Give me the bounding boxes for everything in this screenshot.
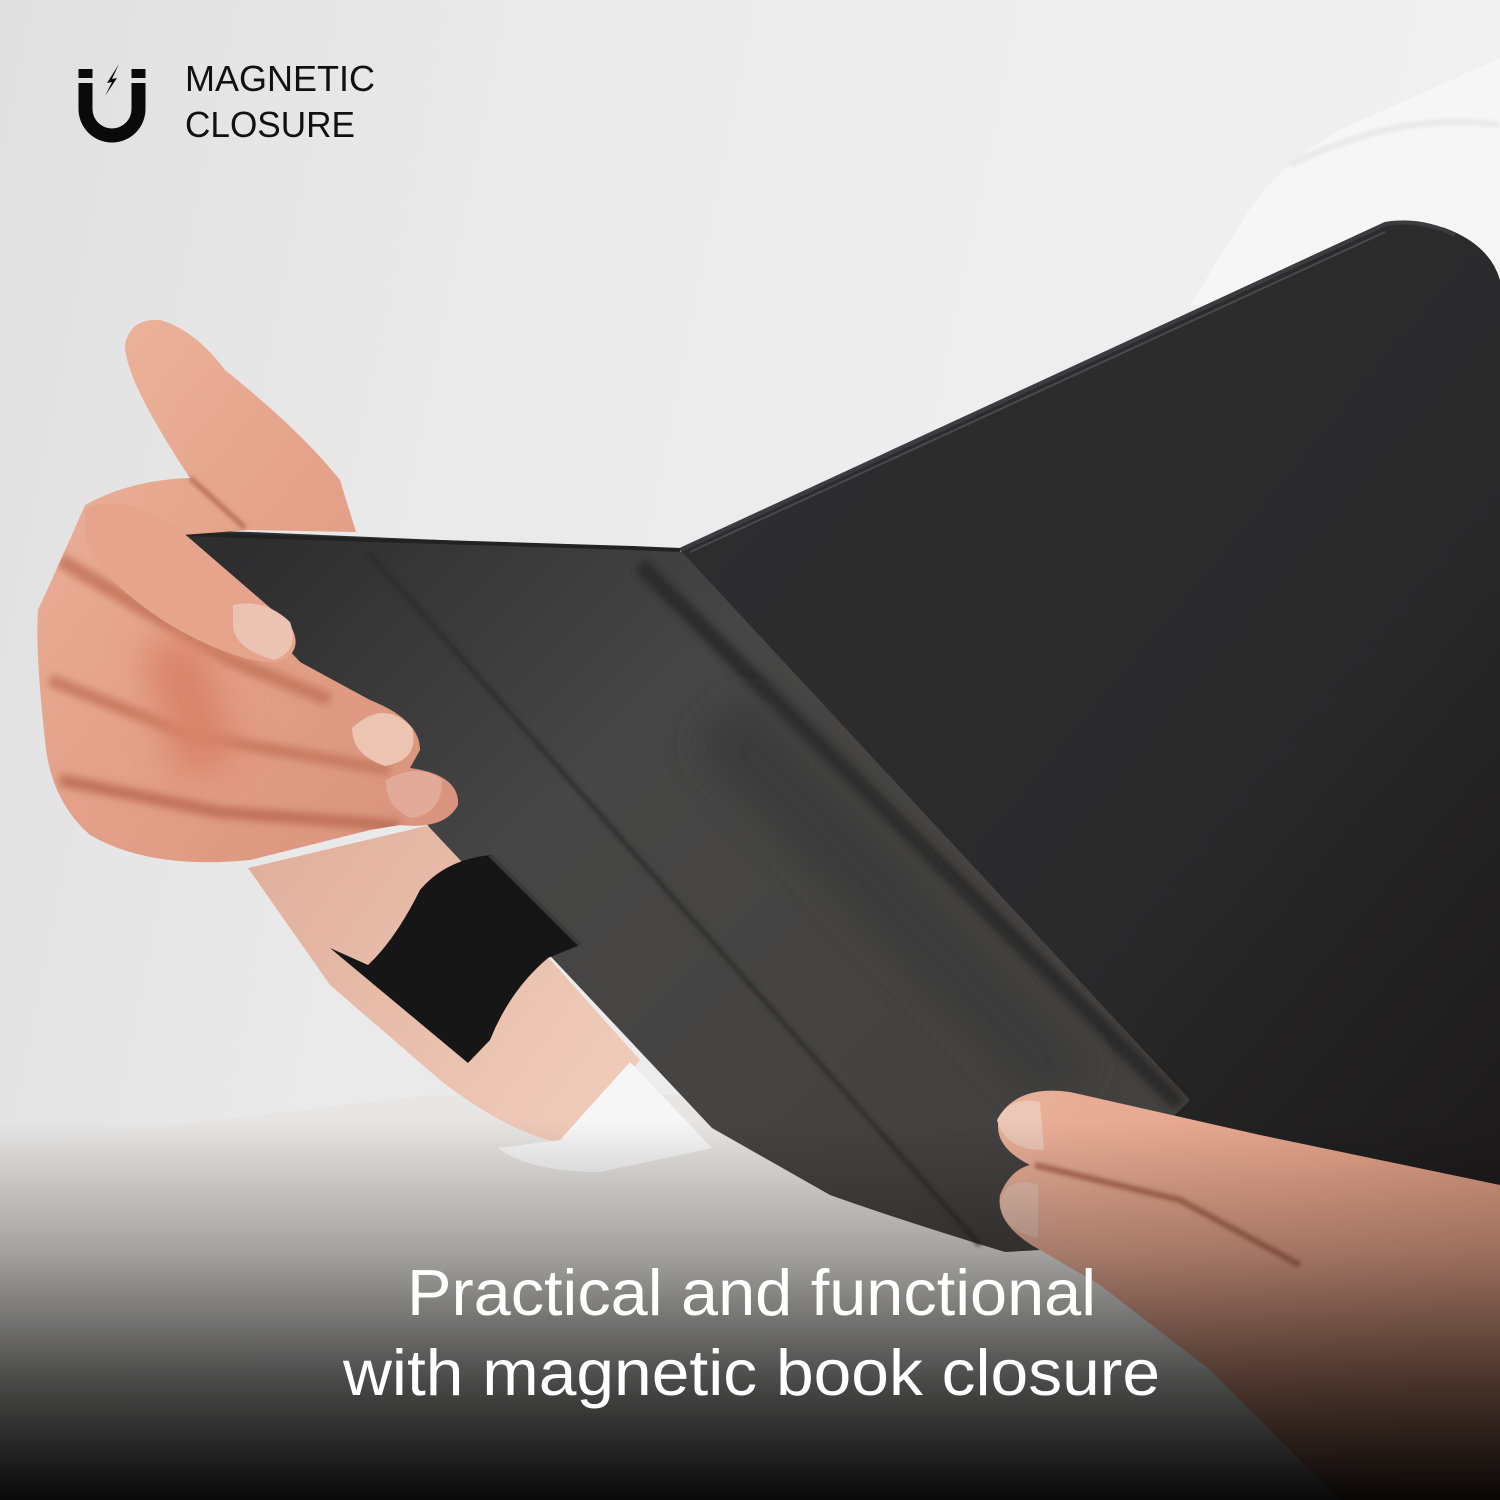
caption headline: Practical and functional xyxy=(407,1256,1096,1329)
book: left inner cover with spine xyxy=(182,531,1190,1252)
book: closure flap xyxy=(330,855,580,1063)
white shirt xyxy=(1190,58,1500,305)
caption headline: with magnetic book closure xyxy=(342,1336,1160,1409)
left forearm and cuff xyxy=(248,825,712,1172)
caption headline xyxy=(342,1256,1160,1409)
table surface xyxy=(0,1095,1500,1500)
icon label: MAGNETIC xyxy=(185,58,375,99)
icon: horseshoe magnet with lightning bolt xyxy=(78,64,146,142)
photo: hands holding open black folio: CLOSURE xyxy=(185,104,355,145)
left hand xyxy=(37,320,458,862)
book: right cover xyxy=(680,222,1500,1205)
fingers and nails xyxy=(85,503,296,662)
bottom dark gradient xyxy=(0,1120,1500,1500)
right hand xyxy=(990,1080,1500,1500)
